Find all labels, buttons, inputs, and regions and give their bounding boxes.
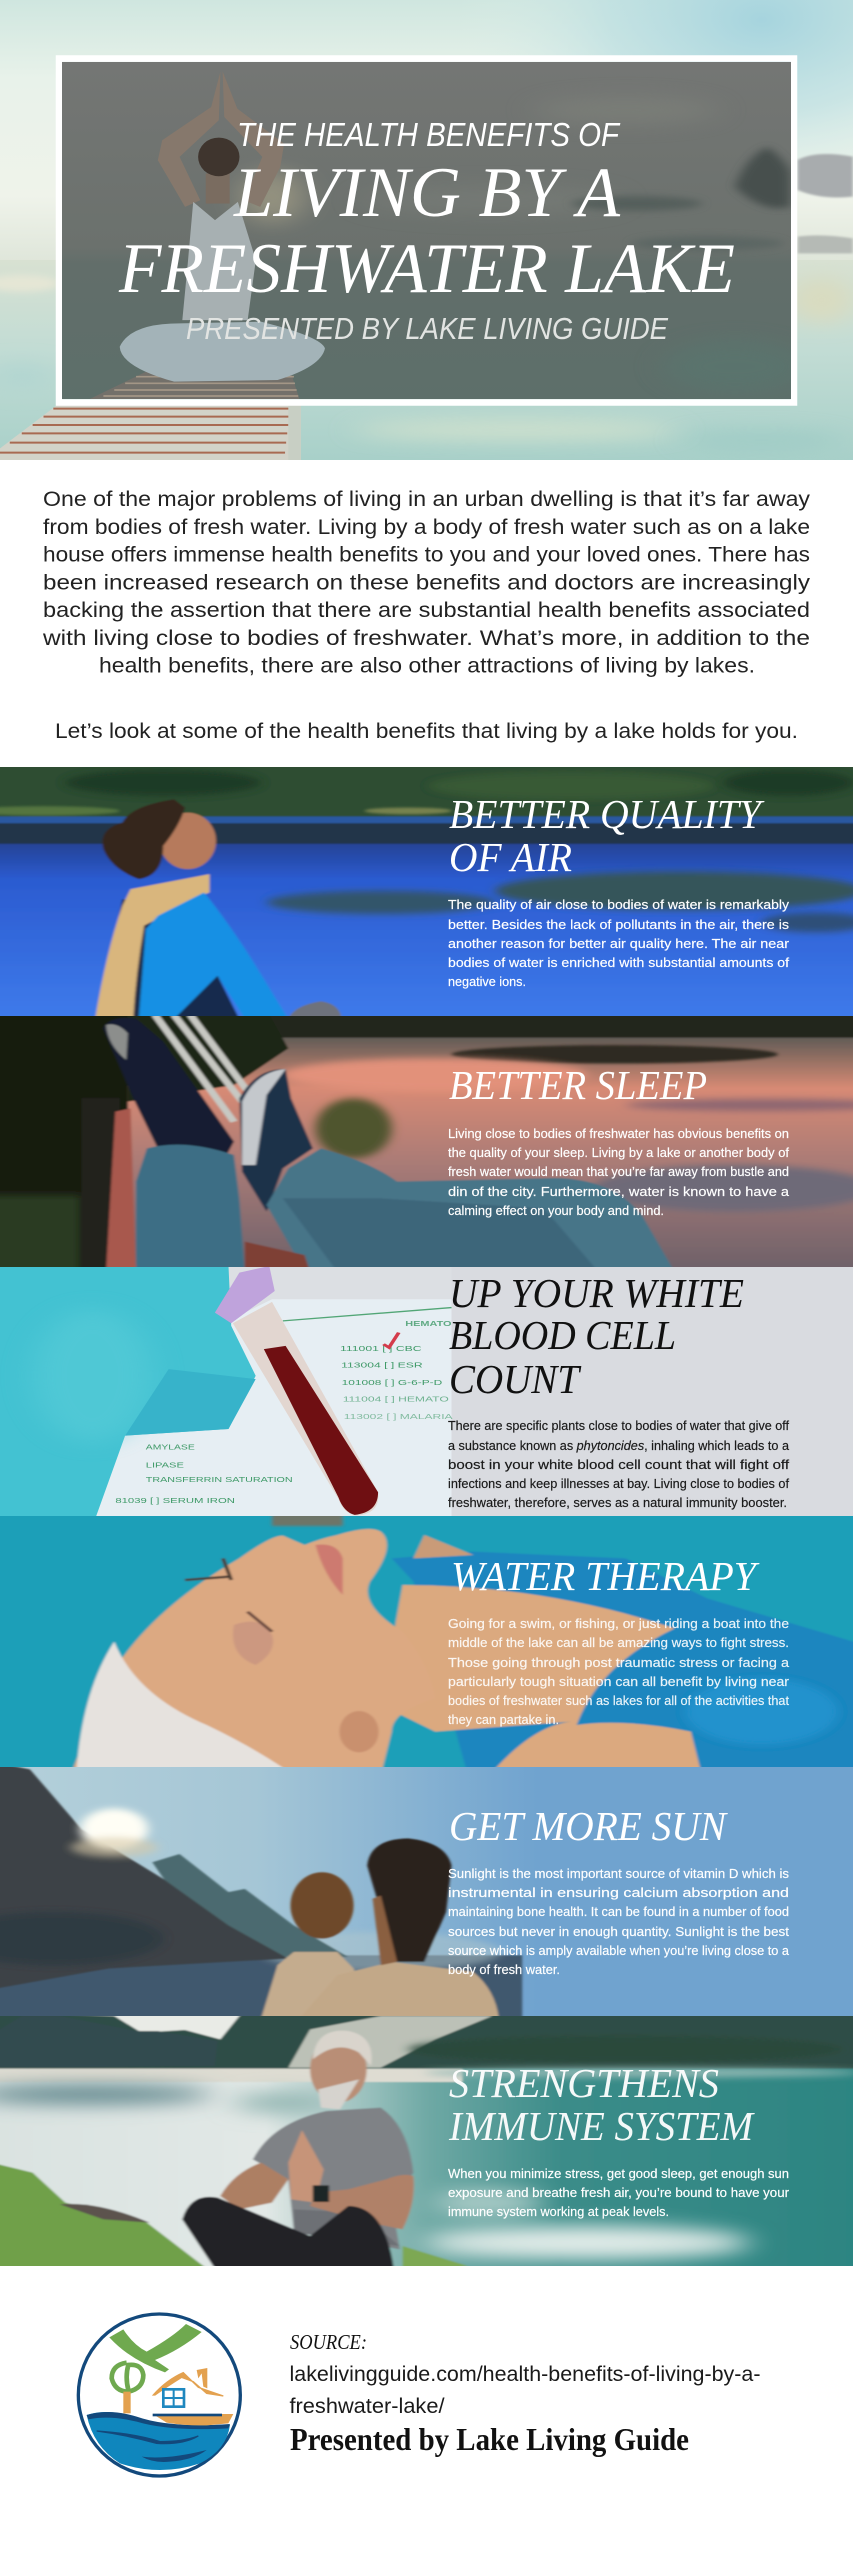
- photo: gloved hand with blood tube over lab form: TRANSFERRIN SATURATION: [146, 1476, 293, 1484]
- body text: bodies of freshwater such as lakes for all of the activities that: [448, 1693, 789, 1708]
- photo: gloved hand with blood tube over lab form: LIPASE: [146, 1461, 184, 1469]
- body text: sources but never in enough quantity. Sunlight is the best: [448, 1924, 789, 1939]
- heading: OF AIR: [449, 834, 572, 880]
- intro paragraph: health benefits, there are also other attractions of living by lakes.: [99, 654, 755, 678]
- body text: another reason for better air quality here. The air near: [448, 936, 790, 951]
- heading: [449, 1270, 744, 1402]
- photo: gloved hand with blood tube over lab form: 111004 [ ] HEMATO: [343, 1396, 449, 1404]
- body text: particularly tough situation can all benefit by living near: [448, 1674, 790, 1689]
- intro paragraph: from bodies of fresh water. Living by a body of fresh water such as on a lake: [43, 516, 810, 539]
- body text: better. Besides the lack of pollutants in the air, there is: [448, 917, 789, 932]
- frame photo: woman in yoga pose, overlaid: [62, 62, 791, 399]
- intro paragraph: house offers immense health benefits to you and your loved ones. There has: [43, 544, 810, 566]
- body text: The quality of air close to bodies of water is remarkably: [448, 897, 789, 912]
- panel: water therapy: [0, 1509, 853, 1775]
- body text: Sunlight is the most important source of vitamin D which is: [448, 1866, 789, 1881]
- heading: BLOOD CELL: [449, 1312, 676, 1358]
- body text: When you minimize stress, get good sleep, get enough sun: [448, 2166, 789, 2181]
- intro paragraph: with living close to bodies of freshwater. What’s more, in addition to the: [42, 627, 810, 650]
- presented by credit: Presented by Lake Living Guide: [290, 2421, 689, 2457]
- body text: maintaining bone health. It can be found in a number of food: [448, 1904, 789, 1919]
- title heading: LIVING BY A: [233, 154, 621, 232]
- body text: Going for a swim, or fishing, or just riding a boat into the: [448, 1616, 789, 1631]
- title heading: THE HEALTH BENEFITS OF: [237, 116, 621, 153]
- body text: [448, 1126, 790, 1218]
- intro paragraph: One of the major problems of living in an urban dwelling is that it’s far away: [43, 488, 811, 511]
- body text: Those going through post traumatic stress or facing a: [448, 1655, 790, 1670]
- body text: Living close to bodies of freshwater has obvious benefits on: [448, 1126, 789, 1141]
- photo: gloved hand with blood tube over lab form: HEMATO: [405, 1320, 452, 1328]
- presented by subtitle: PRESENTED BY LAKE LIVING GUIDE: [186, 311, 668, 346]
- heading: BETTER QUALITY: [449, 791, 765, 837]
- source url: lakelivingguide.com/health-benefits-of-living-by-a-: [290, 2363, 761, 2386]
- body text: a substance known as phytoncides, inhaling which leads to a: [448, 1438, 790, 1453]
- intro paragraph: backing the assertion that there are substantial health benefits associated: [43, 599, 810, 622]
- panel: strengthens immune system: [0, 2009, 853, 2273]
- body text: [448, 1616, 790, 1727]
- body text: body of fresh water.: [448, 1962, 560, 1977]
- photo: gloved hand with blood tube over lab form: 113004 [ ] ESR: [341, 1362, 423, 1370]
- source label: SOURCE:: [290, 2330, 367, 2354]
- body text: bodies of water is enriched with substantial amounts of: [448, 955, 789, 970]
- title heading: FRESHWATER LAKE: [118, 230, 735, 308]
- body text: [448, 1418, 790, 1510]
- body text: instrumental in ensuring calcium absorption and: [448, 1885, 789, 1900]
- source url: freshwater-lake/: [290, 2395, 445, 2418]
- intro paragraph: [42, 488, 811, 678]
- heading: GET MORE SUN: [449, 1803, 729, 1849]
- body text: infections and keep illnesses at bay. Living close to bodies of: [448, 1476, 789, 1491]
- body text: middle of the lake can all be amazing ways to fight stress.: [448, 1635, 789, 1650]
- heading: [448, 2060, 756, 2149]
- body text: din of the city. Furthermore, water is known to have a: [448, 1184, 790, 1199]
- heading: UP YOUR WHITE: [449, 1270, 744, 1316]
- body text: the quality of your sleep. Living by a lake or another body of: [448, 1145, 789, 1160]
- panel: better quality of air: [0, 759, 853, 1025]
- heading: [449, 791, 765, 880]
- panel: get more sun: [0, 1759, 853, 2025]
- body text: boost in your white blood cell count that will fight off: [448, 1457, 789, 1472]
- photo: gloved hand with blood tube over lab form: 113002 [ ] MALARIA: [344, 1413, 453, 1421]
- body text: fresh water would mean that you’re far away from bustle and: [448, 1164, 789, 1179]
- body text: [448, 897, 790, 989]
- title frame: [59, 58, 794, 402]
- intro paragraph: been increased research on these benefits and doctors are increasingly: [43, 572, 811, 594]
- body text: exposure and breathe fresh air, you’re bound to have your: [448, 2185, 790, 2200]
- body text: source which is amply available when you’re living close to a: [448, 1943, 790, 1958]
- title heading: [118, 116, 735, 308]
- hero photo: lake horizon and dock: [0, 0, 853, 460]
- heading: STRENGTHENS: [449, 2060, 719, 2106]
- photo: father and child facing sun over mountain lake: [0, 1767, 853, 2016]
- photo: woman breathing by blue lake: [0, 767, 853, 1016]
- panel: better sleep: [0, 1009, 853, 1275]
- body text: There are specific plants close to bodies of water that give off: [448, 1418, 789, 1433]
- body text: negative ions.: [448, 974, 526, 989]
- panel: up your white blood cell count: [0, 1266, 853, 1519]
- photo: gloved hand with blood tube over lab form: AMYLASE: [146, 1444, 195, 1452]
- intro closing line: Let’s look at some of the health benefits that living by a lake holds for you.: [55, 720, 798, 743]
- photo: gloved hand with blood tube over lab form: 111001 [ ] CBC: [340, 1345, 422, 1353]
- photo: sneakers and jeans in hammock at sunset lake: [0, 1016, 853, 1267]
- body text: [448, 1866, 790, 1977]
- photo: gloved hand with blood tube over lab form: [0, 1267, 853, 1516]
- body text: they can partake in.: [448, 1712, 559, 1727]
- body text: immune system working at peak levels.: [448, 2204, 669, 2219]
- logo: lake living guide: [78, 2314, 240, 2476]
- hero banner: [0, 0, 853, 460]
- photo: gloved hand with blood tube over lab form: 101008 [ ] G-6-P-D: [342, 1379, 442, 1387]
- photo: older man meditating beside turquoise lake: [0, 2016, 853, 2266]
- footer: [78, 2314, 761, 2476]
- source url: [290, 2363, 761, 2418]
- heading: IMMUNE SYSTEM: [448, 2103, 756, 2149]
- heading: COUNT: [449, 1356, 582, 1402]
- body text: freshwater, therefore, serves as a natural immunity booster.: [448, 1495, 787, 1510]
- photo: gloved hand with blood tube over lab form: 81039 [ ] SERUM IRON: [115, 1497, 235, 1505]
- heading: WATER THERAPY: [451, 1553, 760, 1599]
- heading: BETTER SLEEP: [449, 1062, 707, 1108]
- body text: calming effect on your body and mind.: [448, 1203, 664, 1218]
- body text: [448, 2166, 790, 2219]
- photo: older woman floating in water: [0, 1516, 853, 1767]
